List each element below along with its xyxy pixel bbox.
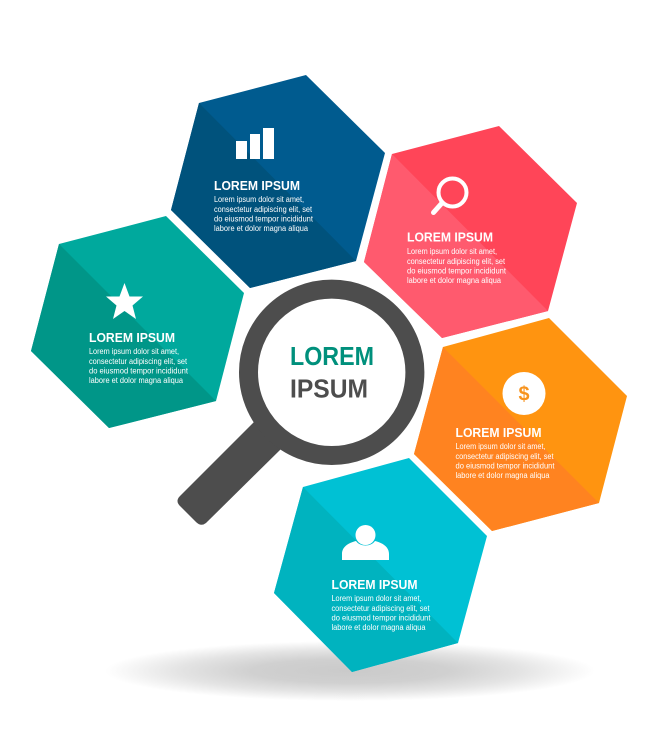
text block: Lorem ipsum dolor sit amet,: [214, 195, 304, 204]
text block: [214, 195, 314, 233]
heading: LOREM IPSUM: [214, 179, 300, 193]
panel: teal hexagon: [31, 216, 244, 428]
ground shadow: [105, 641, 595, 701]
text block: labore et dolor magna aliqua: [407, 276, 502, 285]
text block: do eiusmod tempor incididunt: [89, 366, 189, 376]
hexagon: [274, 458, 487, 672]
text block: labore et dolor magna aliqua: [214, 224, 309, 233]
heading: LOREM IPSUM: [89, 331, 175, 345]
center title: IPSUM: [290, 376, 368, 404]
text block: consectetur adipiscing elit, set: [456, 452, 554, 461]
panel: blue hexagon: [171, 75, 385, 288]
text block: do eiusmod tempor incididunt: [407, 266, 507, 276]
fold shade: [364, 154, 548, 338]
text block: Lorem ipsum dolor sit amet,: [89, 347, 179, 356]
fold shade: [31, 244, 216, 428]
panel: orange hexagon: [414, 318, 627, 531]
text block: consectetur adipiscing elit, set: [407, 257, 506, 266]
text block: consectetur adipiscing elit, set: [214, 205, 313, 214]
text block: consectetur adipiscing elit, set: [332, 604, 430, 613]
text block: [407, 247, 507, 285]
panel: cyan hexagon: [274, 458, 487, 672]
hexagon: [31, 216, 244, 428]
heading: LOREM IPSUM: [407, 230, 493, 244]
heading: LOREM IPSUM: [456, 426, 542, 440]
icon: person: [342, 525, 389, 560]
text block: Lorem ipsum dolor sit amet,: [456, 442, 546, 451]
panel: red hexagon: [364, 126, 577, 338]
heading: LOREM IPSUM: [332, 578, 418, 592]
icon: dollar coin: $: [518, 384, 530, 406]
text block: [332, 594, 431, 632]
hexagon: [414, 318, 627, 531]
icon: star: [106, 283, 143, 319]
text block: Lorem ipsum dolor sit amet,: [332, 594, 422, 603]
text block: consectetur adipiscing elit, set: [89, 357, 188, 366]
icon: magnifier: [434, 178, 466, 212]
text block: do eiusmod tempor incididunt: [214, 214, 314, 224]
center title: LOREM: [290, 343, 374, 371]
hexagon: [364, 126, 577, 338]
center title: [290, 343, 374, 404]
fold shade: [171, 103, 356, 288]
icon: dollar coin: [502, 372, 546, 415]
fold shade: [414, 347, 599, 531]
text block: Lorem ipsum dolor sit amet,: [407, 247, 497, 256]
central magnifying glass: [178, 289, 415, 525]
text block: labore et dolor magna aliqua: [89, 376, 184, 385]
lens ring: [249, 289, 415, 455]
handle: [178, 413, 290, 525]
text block: [89, 347, 189, 385]
text block: [456, 442, 555, 480]
icon: bar chart: [236, 128, 274, 159]
hexagon: [171, 75, 385, 288]
text block: do eiusmod tempor incididunt: [456, 462, 555, 470]
text block: labore et dolor magna aliqua: [456, 471, 550, 480]
text block: do eiusmod tempor incididunt: [332, 614, 431, 622]
text block: labore et dolor magna aliqua: [332, 623, 426, 632]
fold shade: [274, 487, 458, 672]
